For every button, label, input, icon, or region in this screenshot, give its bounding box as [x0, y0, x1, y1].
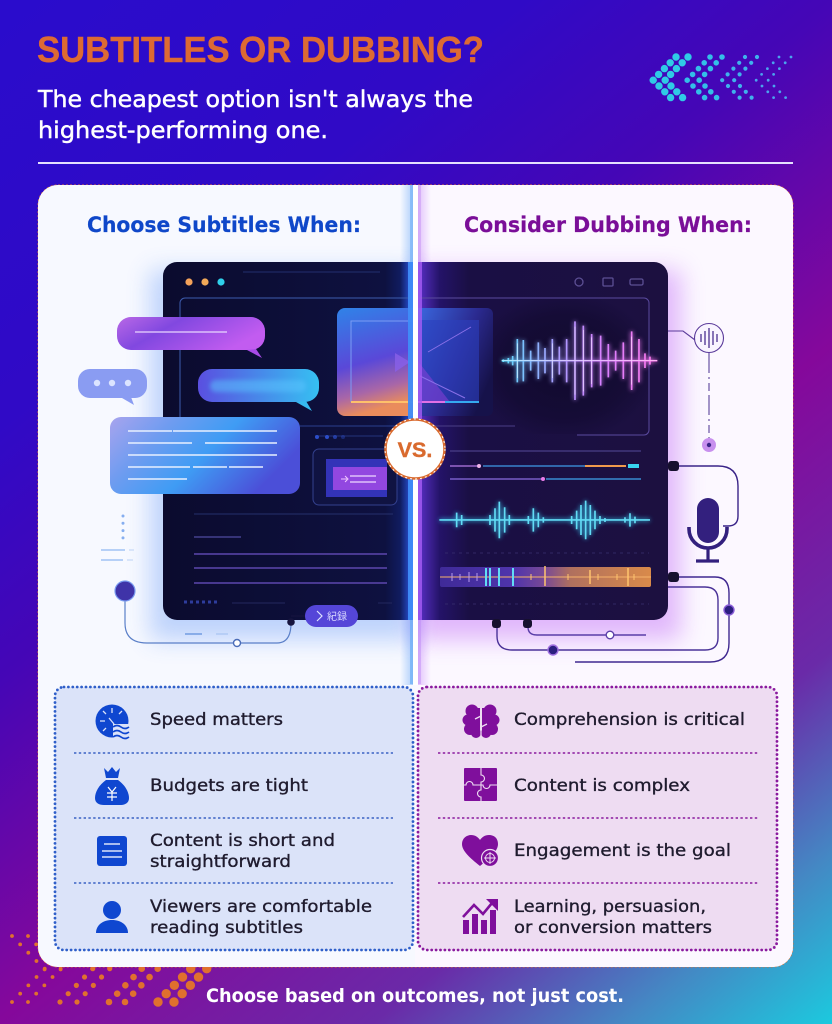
icon: floating subtitle bubble purple: [117, 317, 265, 358]
item text: [514, 897, 712, 938]
icon: brain: [462, 704, 500, 738]
icon: document: [97, 836, 127, 866]
small preview panel: [313, 435, 397, 505]
item text: Budgets are tight: [150, 776, 308, 796]
item text: Engagement is the goal: [514, 841, 731, 861]
item text: Speed matters: [150, 710, 283, 730]
decorative ticks left of device: [101, 516, 134, 560]
header rule: [38, 162, 793, 164]
subtitle: [37, 87, 473, 144]
icon: heart: [462, 835, 498, 866]
timeline audio clip: [440, 553, 651, 604]
heading: dubbing: Consider Dubbing When:: [464, 213, 752, 238]
VS badge: [385, 419, 445, 479]
heading: subtitles: Choose Subtitles When:: [87, 213, 361, 238]
panel: dubbing list: [418, 687, 777, 950]
item text: straightforward: [150, 852, 291, 872]
item text: or conversion matters: [514, 918, 712, 938]
item text: Comprehension is critical: [514, 710, 745, 730]
table lines on screen: [184, 514, 393, 603]
progress tracks: [450, 451, 641, 481]
device screen: [163, 262, 668, 620]
icon: cyan dotted chevrons: [653, 57, 791, 103]
item text: Content is complex: [514, 776, 690, 796]
icon: speed clock: [96, 704, 130, 739]
footer takeaway: Choose based on outcomes, not just cost.: [206, 985, 624, 1007]
VS badge: VS.: [398, 438, 432, 462]
icon: growth chart: [463, 899, 498, 934]
item text: [150, 831, 335, 872]
button pill: [305, 605, 358, 627]
panel: subtitles list: [55, 687, 413, 950]
icon: floating subtitle bubble blue: [198, 369, 319, 411]
window controls: [575, 278, 643, 286]
connector: right circuit cables: [492, 572, 734, 662]
subtitle: The cheapest option isn't always the: [37, 87, 473, 113]
icon: waveform badge with connector: [668, 324, 724, 452]
icon: typing bubble: [78, 369, 147, 405]
item text: reading subtitles: [150, 918, 303, 938]
center divider line: [408, 185, 422, 685]
main audio waveform: [502, 321, 657, 400]
window dots: [185, 278, 225, 286]
icon: large subtitle text bubble: [110, 417, 300, 494]
inner frame: [180, 272, 649, 435]
decorative orange dot chevrons, bottom left: [12, 936, 231, 1002]
item text: Learning, persuasion,: [514, 897, 706, 917]
video thumbnail: [337, 308, 493, 416]
icon: money bag: [95, 767, 129, 805]
title: SUBTITLES OR DUBBING?: [37, 29, 484, 70]
item text: [150, 897, 372, 938]
item text: Viewers are comfortable: [150, 897, 372, 917]
connector: left circuit: [115, 581, 306, 646]
item text: Content is short and: [150, 831, 335, 851]
icon: microphone with cable: [668, 461, 738, 561]
cyan waveform: [439, 501, 650, 539]
main card: [38, 185, 793, 967]
icon: viewer person: [96, 901, 128, 933]
subtitle: highest-performing one.: [38, 118, 328, 144]
icon: puzzle: [464, 768, 497, 801]
button pill: 紀録: [327, 610, 347, 623]
